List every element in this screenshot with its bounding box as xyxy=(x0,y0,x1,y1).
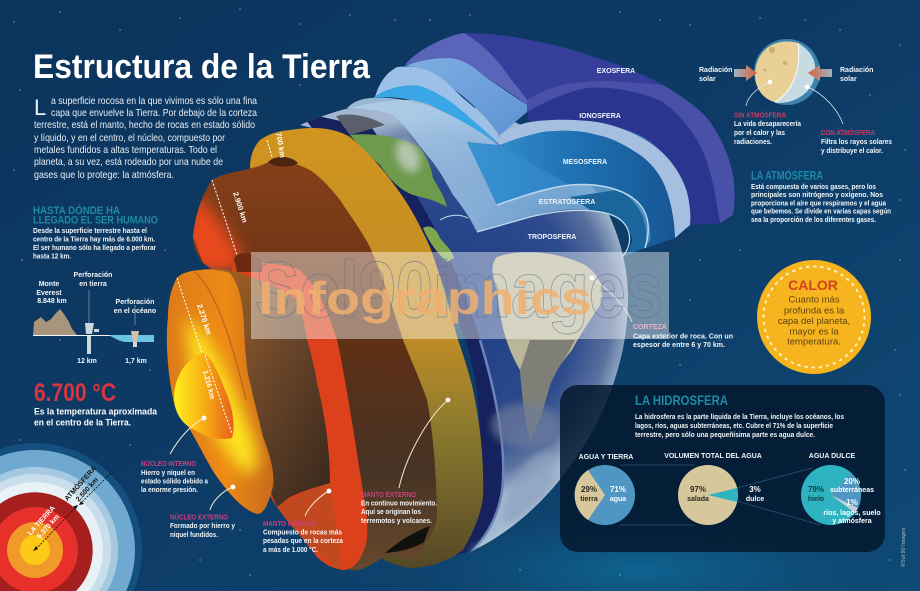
panel: hasta donde ha llegado el ser humano: El ser humano sólo ha llegado a perforar xyxy=(33,245,156,252)
callout: calor: temperatura. xyxy=(787,336,841,348)
label: manto interno: pesadas que en la corteza xyxy=(263,538,343,545)
pie chart: agua y tierra xyxy=(575,465,635,525)
depth diagram: Monte xyxy=(39,281,59,288)
callout: calor: mayor es la xyxy=(789,326,839,338)
text: con atmosfera: y distribuye el calor. xyxy=(821,148,883,155)
title: Estructura de la Tierra xyxy=(33,48,371,86)
text: sin atmosfera: por el calor y las xyxy=(734,130,785,137)
callout: calor: profunda es la xyxy=(784,306,845,316)
text: la atmosfera: principales son nitrógeno y oxígeno. Nos xyxy=(751,192,883,199)
pie chart: agua y tierra: 29% xyxy=(581,485,597,494)
label: manto externo: Aquí se originan los xyxy=(361,509,421,516)
text: la atmosfera: LA ATMÓSFERA xyxy=(751,168,823,182)
label: corteza: espesor de entre 6 y 70 km. xyxy=(633,342,725,349)
earth: central america xyxy=(423,226,454,262)
pie chart: volumen total: 97% xyxy=(690,485,706,494)
pie chart: volumen total: 3% xyxy=(749,485,761,494)
layer thickness measurements: 700 km xyxy=(274,132,287,159)
text: la atmosfera: sea la proporción de los diferentes gases. xyxy=(751,217,876,224)
watermark: Infographics xyxy=(258,272,592,324)
pie chart: agua dulce: y atmósfera xyxy=(832,518,872,525)
layered cross-section chart of earth and atmosphere xyxy=(0,443,142,591)
panel: la hidrosfera: terrestre, pero sólo una pequeñísima parte es agua dulce. xyxy=(635,432,815,439)
label: nucleo interno xyxy=(141,459,208,494)
pie chart: volumen total xyxy=(678,465,764,525)
label: nucleo interno: la enorme presión. xyxy=(141,487,198,494)
pie chart: agua y tierra: tierra xyxy=(580,496,598,503)
crust and upper mantle yellow band xyxy=(250,128,483,568)
depth diagram: en el océano xyxy=(114,308,156,315)
atmosphere layer labels: ESTRATOSFERA xyxy=(539,199,595,206)
nucleo externo xyxy=(167,270,274,514)
pie chart: agua dulce: 79% xyxy=(808,485,824,494)
text: la atmosfera: Está compuesta de varios gases, pero los xyxy=(751,184,876,191)
label: manto interno: a más de 1.000 °C. xyxy=(263,546,318,554)
planet comparison diagram: Radiación xyxy=(699,67,732,74)
pie chart: agua dulce xyxy=(801,465,881,525)
depth diagram: en tierra xyxy=(79,281,107,288)
layer thickness measurements: 1.216 km xyxy=(201,370,215,400)
intro text: y líquido, y en el centro, el núcleo, compuesto por xyxy=(34,132,225,144)
copyright: ©Sol 90 Images xyxy=(900,528,907,567)
label: manto interno xyxy=(263,521,343,554)
intro text: L xyxy=(34,95,46,120)
watermark: Sol90images xyxy=(255,245,663,334)
label: nucleo externo xyxy=(170,512,235,539)
intro text xyxy=(34,95,257,181)
label: nucleo externo: Formado por hierro y xyxy=(170,523,235,530)
pie chart: agua dulce: subterráneas xyxy=(830,487,874,494)
intro text: gases que lo protege: la atmósfera. xyxy=(34,169,174,181)
label: manto interno: Compuesto de rocas más xyxy=(263,530,342,536)
panel: hasta donde ha llegado el ser humano: LLEGADO EL SER HUMANO xyxy=(33,214,158,226)
label: corteza: CORTEZA xyxy=(633,324,667,331)
layered cross-section chart of earth and atmosphere: ATMÓSFERA xyxy=(62,464,98,503)
planet comparison diagram: Radiación xyxy=(840,67,873,74)
label: nucleo externo: níquel fundidos. xyxy=(170,532,218,539)
label: corteza xyxy=(633,324,733,349)
manto externo xyxy=(185,157,437,570)
pie chart: agua dulce: ríos, lagos, suelo xyxy=(823,510,881,517)
panel: hasta donde ha llegado el ser humano: Desde la superficie terrestre hasta el xyxy=(33,228,147,235)
temperature callout: en el centro de la Tierra. xyxy=(34,418,131,428)
layered cross-section chart of earth and atmosphere: 6.370 km xyxy=(36,514,61,540)
label: manto externo: En continuo movimiento. xyxy=(361,500,437,508)
panel: la hidrosfera: AGUA DULCE xyxy=(809,453,856,460)
depth diagram: Perforación xyxy=(74,272,112,279)
callout lines and dots xyxy=(170,276,632,516)
label: corteza: Capa exterior de roca. Con un xyxy=(633,334,733,340)
intro text: terrestre, está el manto, hecho de rocas en estado sólido xyxy=(34,119,255,131)
intro text: capa que envuelve la Tierra. Por debajo de la corteza xyxy=(51,107,257,119)
text: sin atmosfera xyxy=(734,110,801,146)
label: nucleo interno: Hierro y níquel en xyxy=(141,470,195,477)
pie chart: agua y tierra: agua xyxy=(610,496,626,503)
temperature callout xyxy=(34,379,158,428)
label: nucleo interno: NÚCLEO INTERNO xyxy=(141,459,196,468)
intro text: metales fundidos a altas temperaturas. Todo el xyxy=(34,144,217,156)
panel: hasta donde ha llegado el ser humano xyxy=(33,204,158,365)
label: nucleo interno: estado sólido debido a xyxy=(141,478,208,486)
pie chart: agua dulce: 20% xyxy=(844,477,860,486)
panel: la hidrosfera: La hidrosfera es la parte líquida de la Tierra, incluye los océanos, los xyxy=(635,414,844,421)
manto interno xyxy=(196,253,367,570)
exosfera xyxy=(405,33,734,225)
pie chart: volumen total: salada xyxy=(687,496,709,503)
text: con atmosfera: CON ATMÓSFERA xyxy=(821,128,875,137)
icon: arrow right radiation xyxy=(808,65,832,81)
depth diagram: 8.848 km xyxy=(37,298,67,305)
label: manto externo: terremotos y volcanes. xyxy=(361,518,432,525)
nucleo interno xyxy=(174,353,234,439)
text: la atmosfera xyxy=(751,168,891,224)
callout: calor: CALOR xyxy=(788,277,838,293)
icon: arrow left radiation xyxy=(734,65,757,81)
atmosphere layer labels: MESOSFERA xyxy=(563,159,607,166)
label: manto externo: MANTO EXTERNO xyxy=(361,492,416,499)
pie chart: agua dulce: 1% xyxy=(846,498,858,507)
earth: clouds xyxy=(491,403,559,447)
ionosfera xyxy=(375,58,690,240)
intro text: a superficie rocosa en la que vivimos es sólo una fina xyxy=(51,95,257,107)
label: manto externo xyxy=(361,492,437,525)
panel: hasta donde ha llegado el ser humano: hasta 12 km. xyxy=(33,254,71,260)
label: manto interno: MANTO INTERNO xyxy=(263,521,316,528)
pie chart: volumen total: dulce xyxy=(746,496,764,503)
troposfera xyxy=(440,210,630,257)
panel: la hidrosfera: LA HIDROSFERA xyxy=(635,392,728,408)
panel: la hidrosfera: AGUA Y TIERRA xyxy=(579,454,633,461)
text: con atmosfera xyxy=(821,128,892,155)
planet comparison diagram: solar xyxy=(840,76,857,83)
atmosphere layer labels: EXOSFERA xyxy=(597,68,635,75)
earth: north america xyxy=(350,134,447,207)
atmosphere layer labels xyxy=(528,68,635,241)
layer thickness measurements xyxy=(177,132,287,434)
layer thickness measurements: 2.270 km xyxy=(195,303,214,336)
callout: calor xyxy=(757,260,871,374)
layer thickness measurements: 2.900 km xyxy=(231,191,250,224)
earth: south america xyxy=(492,252,602,440)
text: con atmosfera: Filtra los rayos solares xyxy=(821,139,892,146)
temperature callout: 6.700 °C xyxy=(34,379,116,407)
layered cross-section chart of earth and atmosphere: 2.500 km xyxy=(75,477,100,503)
pie chart: agua y tierra: 71% xyxy=(610,485,626,494)
planet comparison diagram: solar xyxy=(699,76,716,83)
text: sin atmosfera: SIN ATMÓSFERA xyxy=(734,110,786,120)
depth diagram: Perforación xyxy=(116,299,154,306)
text: la atmosfera: proporciona el aire que respiramos y el agua xyxy=(751,200,886,208)
panel: la hidrosfera xyxy=(560,385,885,552)
earth globe xyxy=(300,100,628,560)
depth diagram: 1,7 km xyxy=(125,358,147,365)
intro text: planeta, a su vez, está rodeado por una nube de xyxy=(34,156,223,168)
mesosfera xyxy=(373,86,675,248)
planet comparison diagram xyxy=(699,39,873,124)
temperature callout: Es la temperatura aproximada xyxy=(34,406,158,416)
atmosphere layer labels: TROPOSFERA xyxy=(528,234,576,241)
callout: calor: capa del planeta, xyxy=(778,316,850,327)
panel: hasta donde ha llegado el ser humano: HASTA DÓNDE HA xyxy=(33,204,120,217)
estratosfera xyxy=(347,98,650,257)
panel: la hidrosfera: VOLUMEN TOTAL DEL AGUA xyxy=(664,453,762,460)
atmosphere layer labels: IONOSFERA xyxy=(579,113,621,120)
text: sin atmosfera: radiaciones. xyxy=(734,139,772,146)
depth diagram: 12 km xyxy=(77,358,97,365)
layered cross-section chart of earth and atmosphere: LA TIERRA xyxy=(27,505,57,537)
pie chart: agua dulce: hielo xyxy=(808,496,824,503)
panel: la hidrosfera: lagos, ríos, aguas subterráneas, etc. Cubre el 71% de la superficie xyxy=(635,423,833,430)
callout: calor: Cuanto más xyxy=(788,294,840,306)
depth diagram xyxy=(33,272,156,365)
text: sin atmosfera: La vida desaparecería xyxy=(734,121,801,128)
panel: hasta donde ha llegado el ser humano: centro de la Tierra hay más de 6.000 km. xyxy=(33,236,155,244)
text: la atmosfera: que bebemos. Se divide en varias capas según xyxy=(751,208,891,216)
depth diagram: Everest xyxy=(36,290,62,297)
label: nucleo externo: NÚCLEO EXTERNO xyxy=(170,512,228,522)
